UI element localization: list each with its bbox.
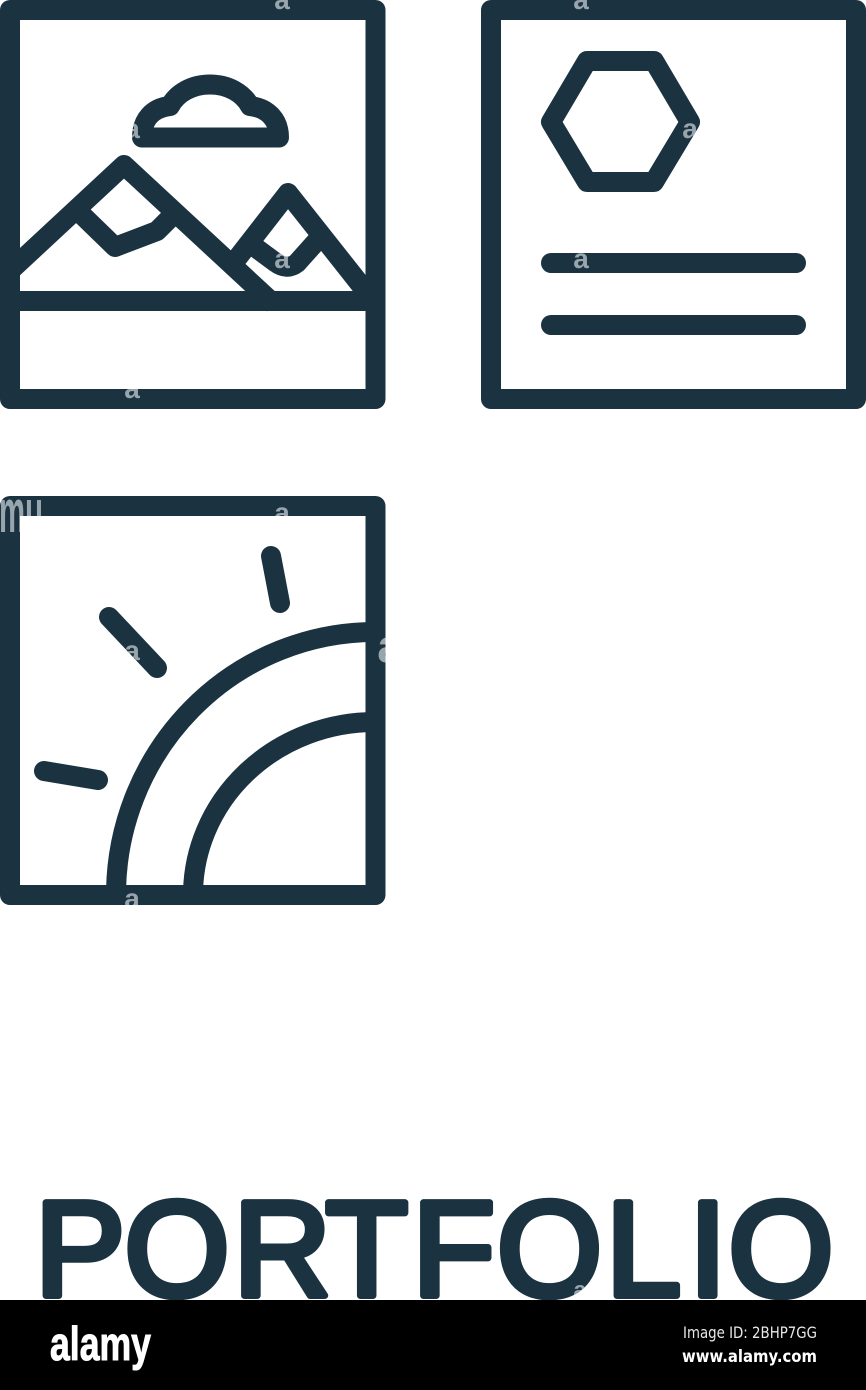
watermark fragments: mu bbox=[0, 478, 43, 545]
watermark fragments bbox=[0, 0, 698, 1304]
watermark fragments: a bbox=[573, 1277, 587, 1304]
website: www.alamy.com bbox=[682, 1347, 817, 1367]
image id: Image ID: 2BHP7GG bbox=[683, 1323, 817, 1342]
footer bar bbox=[0, 1300, 866, 1390]
icon part: large mountain bbox=[12, 165, 274, 304]
watermark fragments: a bbox=[124, 373, 140, 404]
icon part: cloud bbox=[142, 84, 279, 138]
watermark fragments: a bbox=[274, 243, 290, 274]
watermark fragments: a bbox=[124, 113, 140, 144]
watermark fragments: a bbox=[573, 243, 589, 274]
icon: document with hexagon bbox=[491, 10, 856, 399]
watermark fragments: a bbox=[682, 113, 698, 144]
title: PORTFOLIO bbox=[35, 1174, 834, 1324]
watermark fragments: a bbox=[377, 620, 403, 672]
watermark fragments: a bbox=[124, 883, 140, 914]
icon: sun rising in frame bbox=[10, 506, 376, 895]
watermark fragments: a bbox=[274, 497, 290, 528]
icon: landscape photo bbox=[10, 10, 376, 399]
footer logo: alamy bbox=[50, 1317, 151, 1370]
icon part: small mountain bbox=[232, 193, 375, 303]
watermark fragments: a bbox=[124, 635, 140, 666]
